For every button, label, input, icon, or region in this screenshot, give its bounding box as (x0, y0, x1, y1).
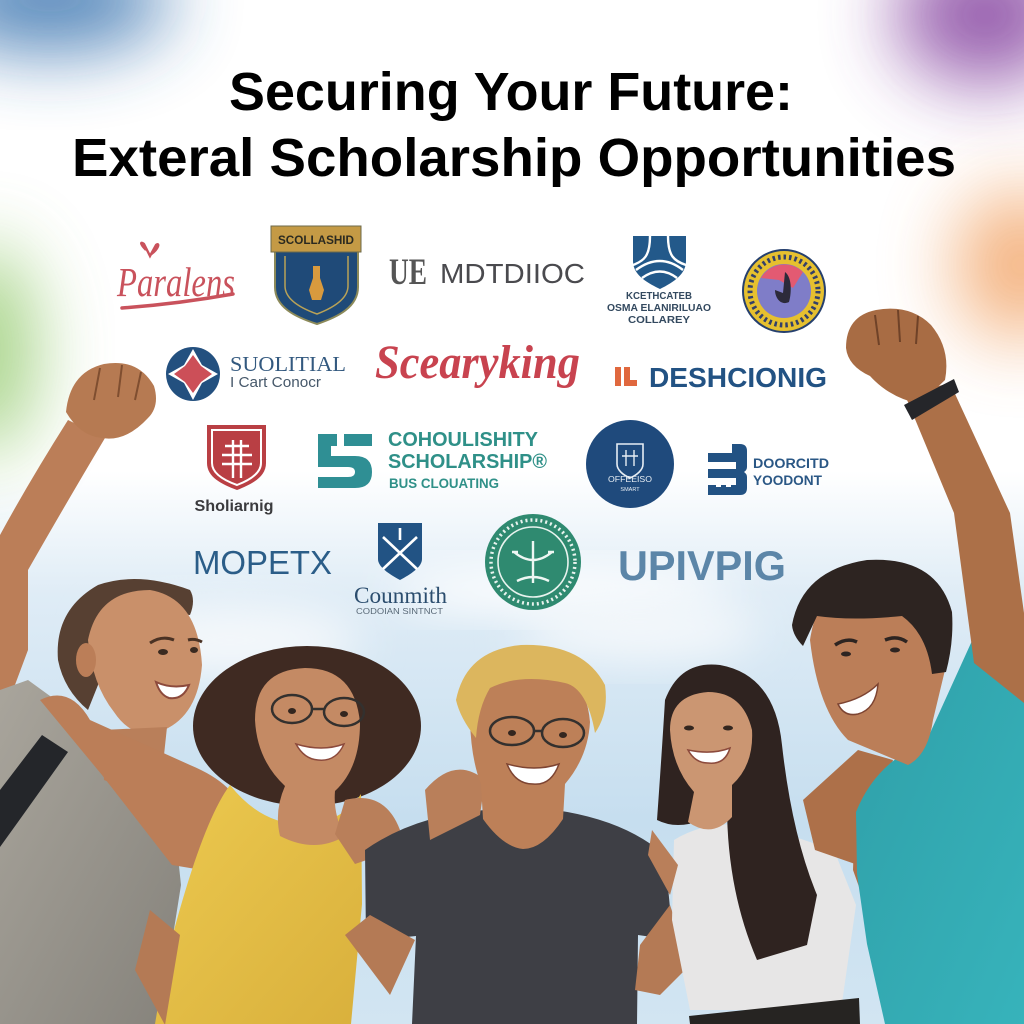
logo: navy round seal: SMART (620, 487, 640, 493)
logo: Counmith shield: CODOIAN SINTNCT (356, 607, 443, 616)
logo: Cohoulishity Scholarship: SCHOLARSHIP® (388, 451, 547, 473)
backpack strap (0, 735, 68, 847)
student 5: teal tee, raised right arm (792, 309, 1024, 1024)
logo: Counmith shield: Counmith (354, 583, 448, 608)
title: Exteral Scholarship Opportunities (72, 128, 956, 188)
logo: UE MDTDIIOC: MDTDIIOC (440, 258, 585, 289)
logo: Cohoulishity Scholarship: COHOULISHITY (388, 429, 539, 451)
logo: Scearyking script: Scearyking (375, 336, 580, 389)
logo: yellow round badge (743, 250, 825, 332)
logo: Suolitial (166, 347, 346, 401)
student 3: charcoal tee, blonde hair, glasses (345, 645, 673, 1024)
logo: green round seal (485, 514, 581, 610)
logo: Doorcitd Yoodont (708, 444, 829, 495)
logo: Scollashid crest (271, 226, 361, 324)
logo: Sholiarnig shield: Sholiarnig (194, 498, 274, 515)
logo: Doorcitd Yoodont: DOORCITD (753, 456, 829, 471)
logo: Suolitial: SUOLITIAL (230, 352, 346, 376)
logo: blue shield college: KCETHCATEB (626, 290, 692, 302)
logo: Upivpig wordmark: UPIVPIG (618, 542, 786, 589)
logo: Paralens script (116, 243, 235, 308)
logo: Scollashid crest: SCOLLASHID (278, 235, 354, 247)
title (72, 62, 956, 188)
logo: UE MDTDIIOC (389, 252, 585, 293)
logo: blue shield college: OSMA ELANIRILUAO (607, 302, 711, 314)
student 4: white top, long dark hair (635, 664, 860, 1024)
logo: blue shield college (607, 236, 711, 326)
logo: Mopetx wordmark: MOPETX (193, 544, 332, 581)
logo: UE MDTDIIOC: UE (389, 252, 427, 293)
logo: Cohoulishity Scholarship: BUS CLOUATING (389, 476, 499, 491)
raised arm and fist (0, 363, 156, 725)
logo: Sholiarnig shield (194, 425, 274, 515)
student 2: yellow top, curly hair, glasses (40, 646, 421, 1024)
logo: navy round seal: OFFEEISO (608, 474, 652, 484)
logo: Counmith shield (354, 523, 448, 616)
title: Securing Your Future: (229, 62, 793, 122)
logo: Suolitial: I Cart Conocr (230, 374, 321, 391)
logo: navy round seal (586, 420, 674, 508)
logo: Doorcitd Yoodont: YOODONT (753, 473, 823, 488)
student 1: grey tee, raised left arm (0, 363, 202, 1024)
logo: Cohoulishity Scholarship (318, 429, 547, 491)
raised arm and fist (846, 309, 1024, 703)
logo: blue shield college: COLLAREY (628, 314, 690, 326)
logo: Deshcionig: DESHCIONIG (649, 362, 827, 393)
logo: Paralens script: Paralens (116, 259, 235, 305)
